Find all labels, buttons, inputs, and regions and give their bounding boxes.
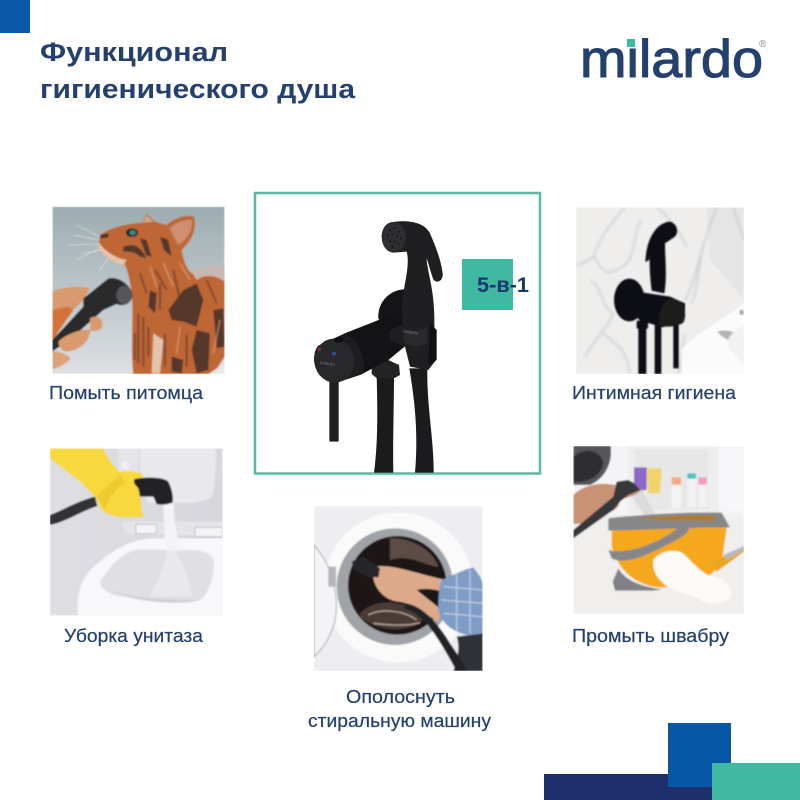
- panel: rinse the washing machine: [308, 506, 491, 731]
- logo: milardo: milardo: [580, 30, 763, 89]
- panel: wash a pet: [49, 207, 225, 403]
- label: стиральную машину: [308, 711, 491, 731]
- corner accent: top left: [0, 0, 30, 33]
- photo: cat being showered: [52, 207, 225, 374]
- title: [40, 37, 356, 104]
- corner accent: bottom right blocks: [544, 723, 800, 800]
- panel: product with 5-in-1 badge: [255, 193, 540, 474]
- frame: [255, 193, 540, 474]
- title: Функционал: [40, 37, 228, 67]
- photo: rinsing mop in orange bucket: [573, 446, 744, 614]
- badge: 5-в-1: 5-в-1: [477, 274, 529, 297]
- panel: clean the toilet: [50, 448, 223, 646]
- logo: milardo: ®: [759, 39, 767, 50]
- panel: intimate hygiene: [572, 207, 744, 403]
- label: Интимная гигиена: [572, 383, 737, 403]
- label: Промыть швабру: [572, 626, 729, 646]
- icon: black bidet faucet: [311, 221, 443, 473]
- label: [308, 687, 491, 731]
- label: Уборка унитаза: [64, 626, 204, 646]
- photo: hands rinsing washing machine drum: [314, 506, 483, 671]
- badge: 5-в-1: [462, 259, 529, 310]
- photo: gloved hand rinsing toilet bowl: [50, 448, 223, 616]
- photo: marble wall with faucet: [576, 207, 744, 374]
- title: гигиенического душа: [40, 74, 356, 104]
- icon: black bidet faucet: milardo: [404, 329, 419, 336]
- label: Ополоснуть: [346, 687, 455, 707]
- label: Помыть питомца: [49, 383, 204, 403]
- icon: black bidet faucet: milardo: [320, 360, 336, 367]
- panel: rinse the mop: [572, 446, 744, 646]
